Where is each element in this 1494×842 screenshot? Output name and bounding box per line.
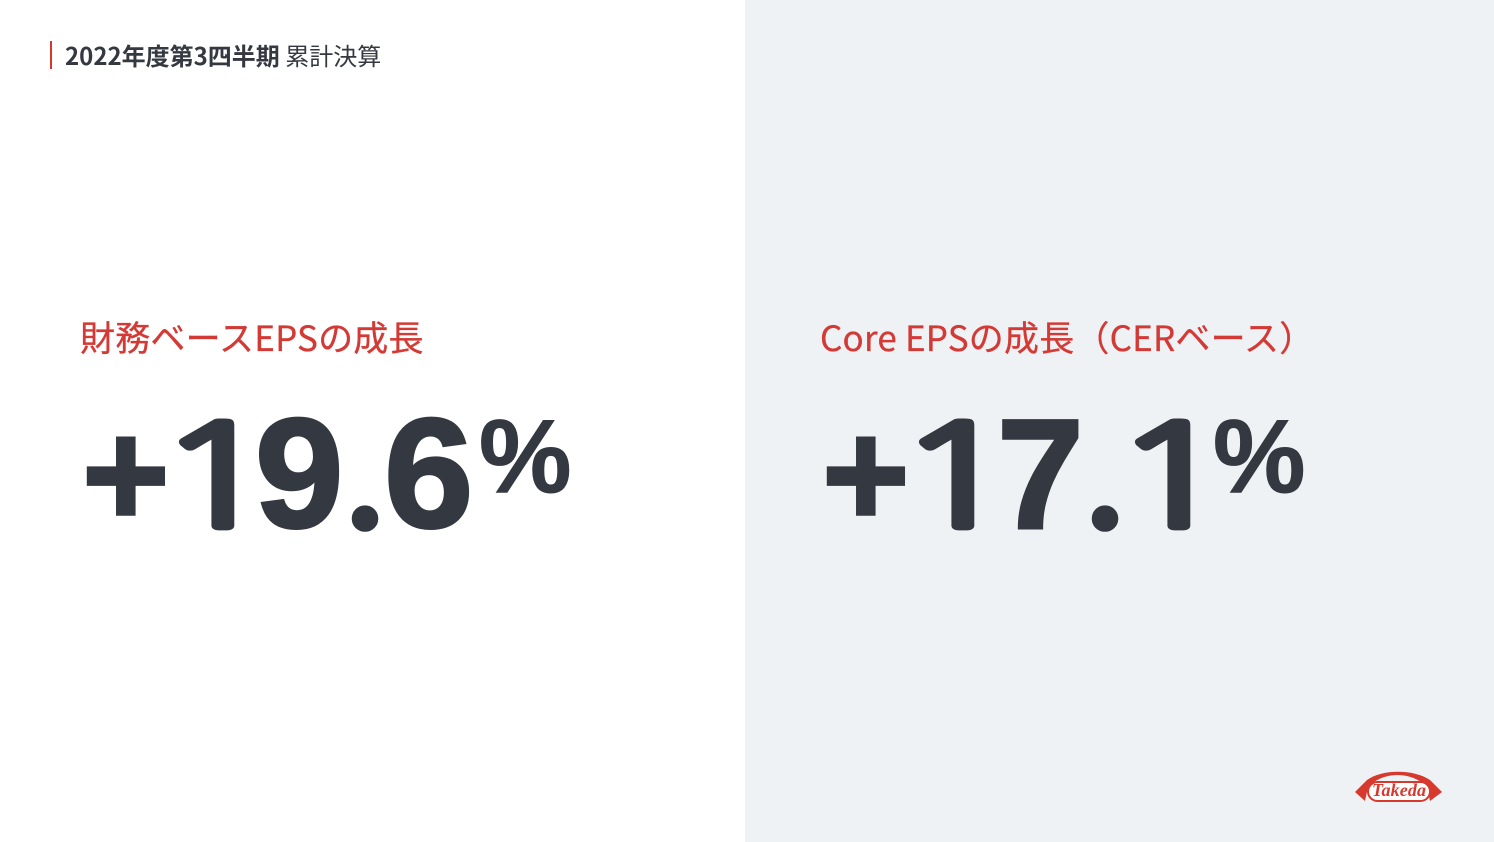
heading: reported EPS growth: 財務ベースEPSの成長 <box>80 311 424 362</box>
header accent bar <box>50 41 52 69</box>
number <box>822 318 1235 562</box>
logo: Takeda <box>1355 772 1442 802</box>
percent sign: % <box>1213 400 1305 515</box>
percent sign: % <box>479 400 571 515</box>
number <box>82 318 473 561</box>
heading: core EPS growth: Core EPSの成長（CERベース） <box>820 311 1314 362</box>
right panel background <box>745 0 1494 842</box>
value: reported EPS growth <box>82 400 571 540</box>
logo: Takeda: Takeda <box>1372 780 1426 800</box>
value: core EPS growth <box>822 400 1305 540</box>
title: 2022年度第3四半期 累計決算 <box>65 37 381 72</box>
